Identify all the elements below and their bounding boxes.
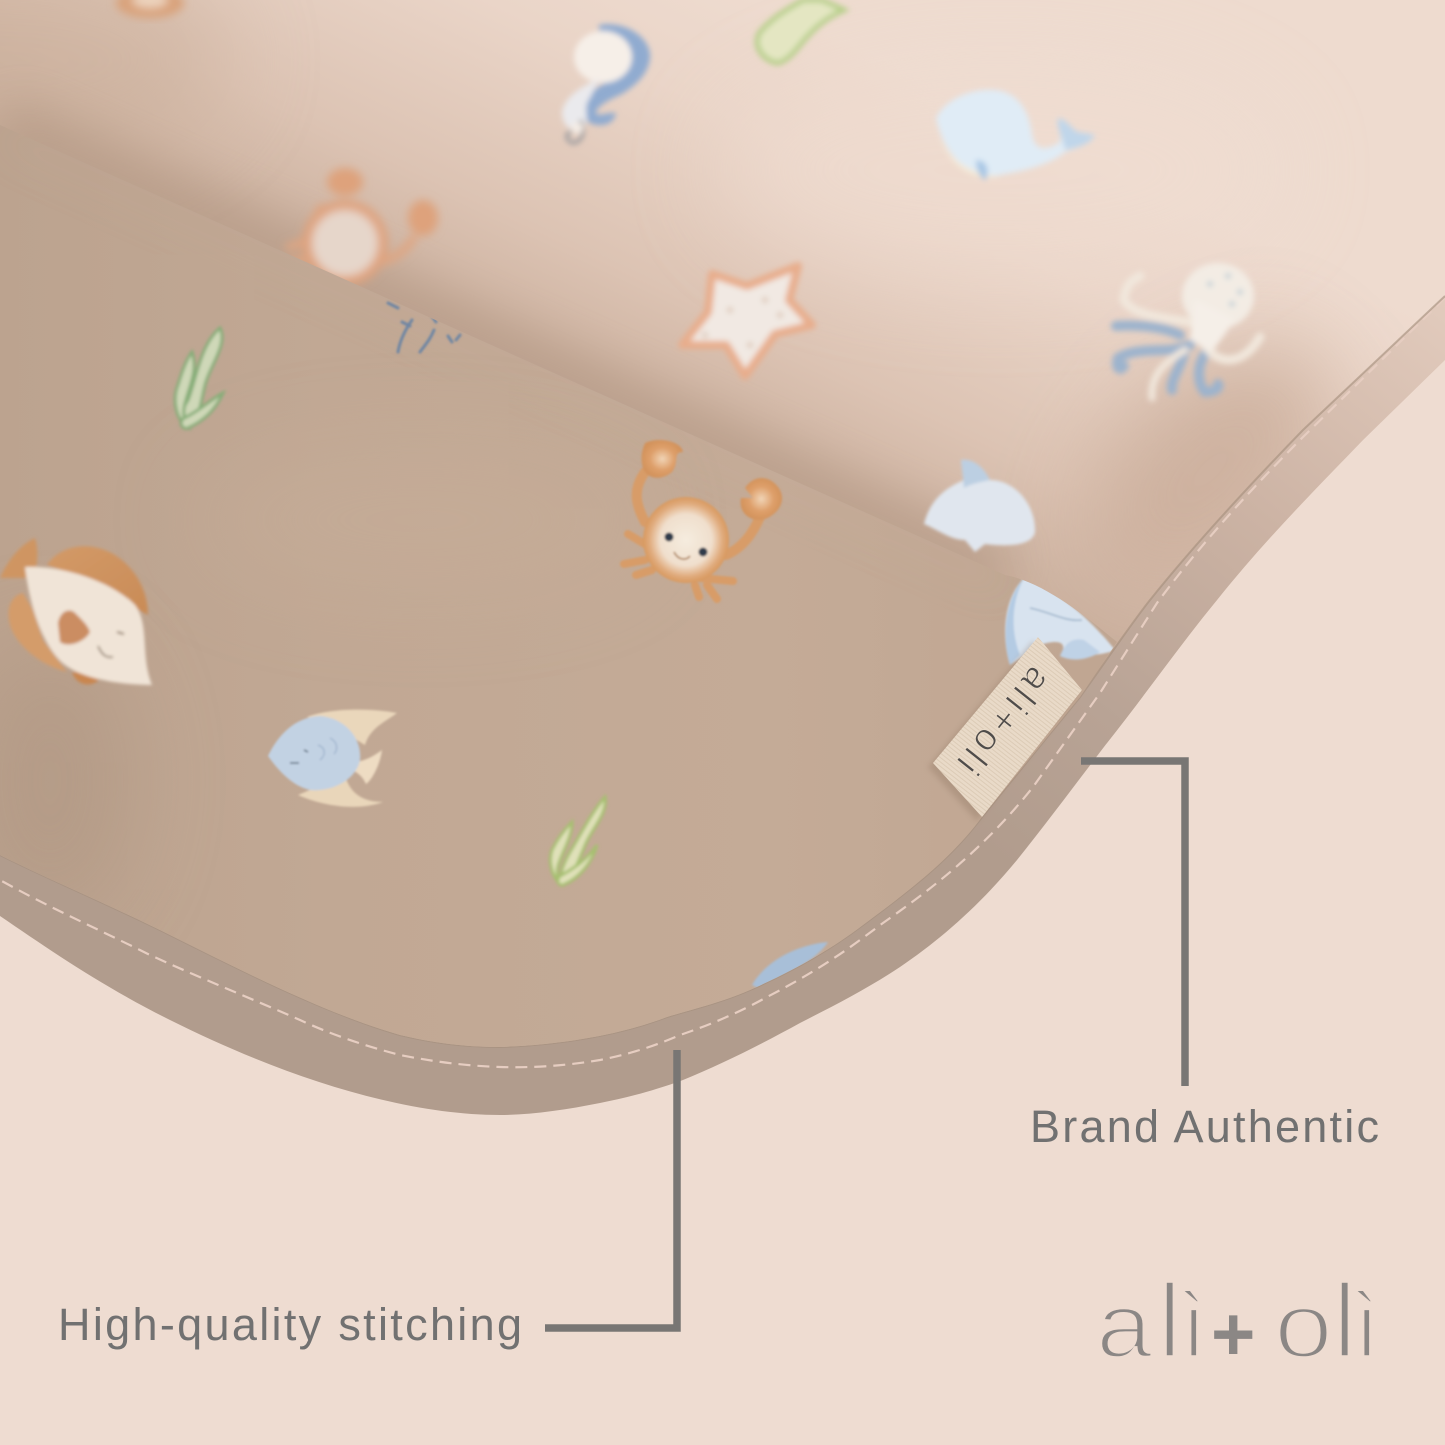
icon: whale xyxy=(936,90,1095,180)
brand logo: + xyxy=(1211,1292,1255,1377)
label: stitching: High-quality stitching xyxy=(58,1299,522,1350)
icon: tentacles at fold xyxy=(388,303,460,352)
icon: crab xyxy=(624,440,782,599)
stitching line xyxy=(0,298,1445,1067)
icon: dolphin tail at corner xyxy=(1005,578,1115,665)
brand logo: ì xyxy=(1354,1275,1380,1377)
panel: bound edge of bib xyxy=(0,296,1445,1115)
icon: dolphin behind fold xyxy=(924,460,1035,552)
icon: blue fragment near hem xyxy=(752,942,828,988)
icon: woven brand tag xyxy=(928,637,1082,821)
brand logo: l xyxy=(1158,1263,1181,1380)
brand logo xyxy=(1096,1263,1380,1380)
leader line: brand authentic xyxy=(1081,761,1185,1086)
brand logo: ì xyxy=(1181,1275,1207,1377)
icon: cropped orange motif at top xyxy=(116,0,184,18)
icon: seaweed left xyxy=(175,328,223,428)
panel: front folded layer of bib xyxy=(0,125,1117,1047)
brand logo: a xyxy=(1096,1274,1153,1377)
tag brand text: ali+oli xyxy=(948,658,1059,782)
icon: seahorse xyxy=(562,24,650,143)
icon: blurred seaweed xyxy=(757,0,844,63)
brand logo: o xyxy=(1274,1274,1333,1377)
label: brand authentic: Brand Authentic xyxy=(1030,1101,1379,1152)
icon: blurred crab xyxy=(286,168,438,281)
icon: starfish xyxy=(682,266,812,376)
leader line: stitching xyxy=(545,1050,677,1328)
icon: seaweed lower xyxy=(550,797,605,885)
icon: blue fish xyxy=(268,710,397,807)
brand logo: l xyxy=(1333,1263,1356,1380)
icon: flat fish xyxy=(0,538,152,685)
icon: octopus xyxy=(1116,263,1260,398)
panel: back of bib with blurred print xyxy=(0,0,1380,743)
seam line xyxy=(0,296,1445,1047)
